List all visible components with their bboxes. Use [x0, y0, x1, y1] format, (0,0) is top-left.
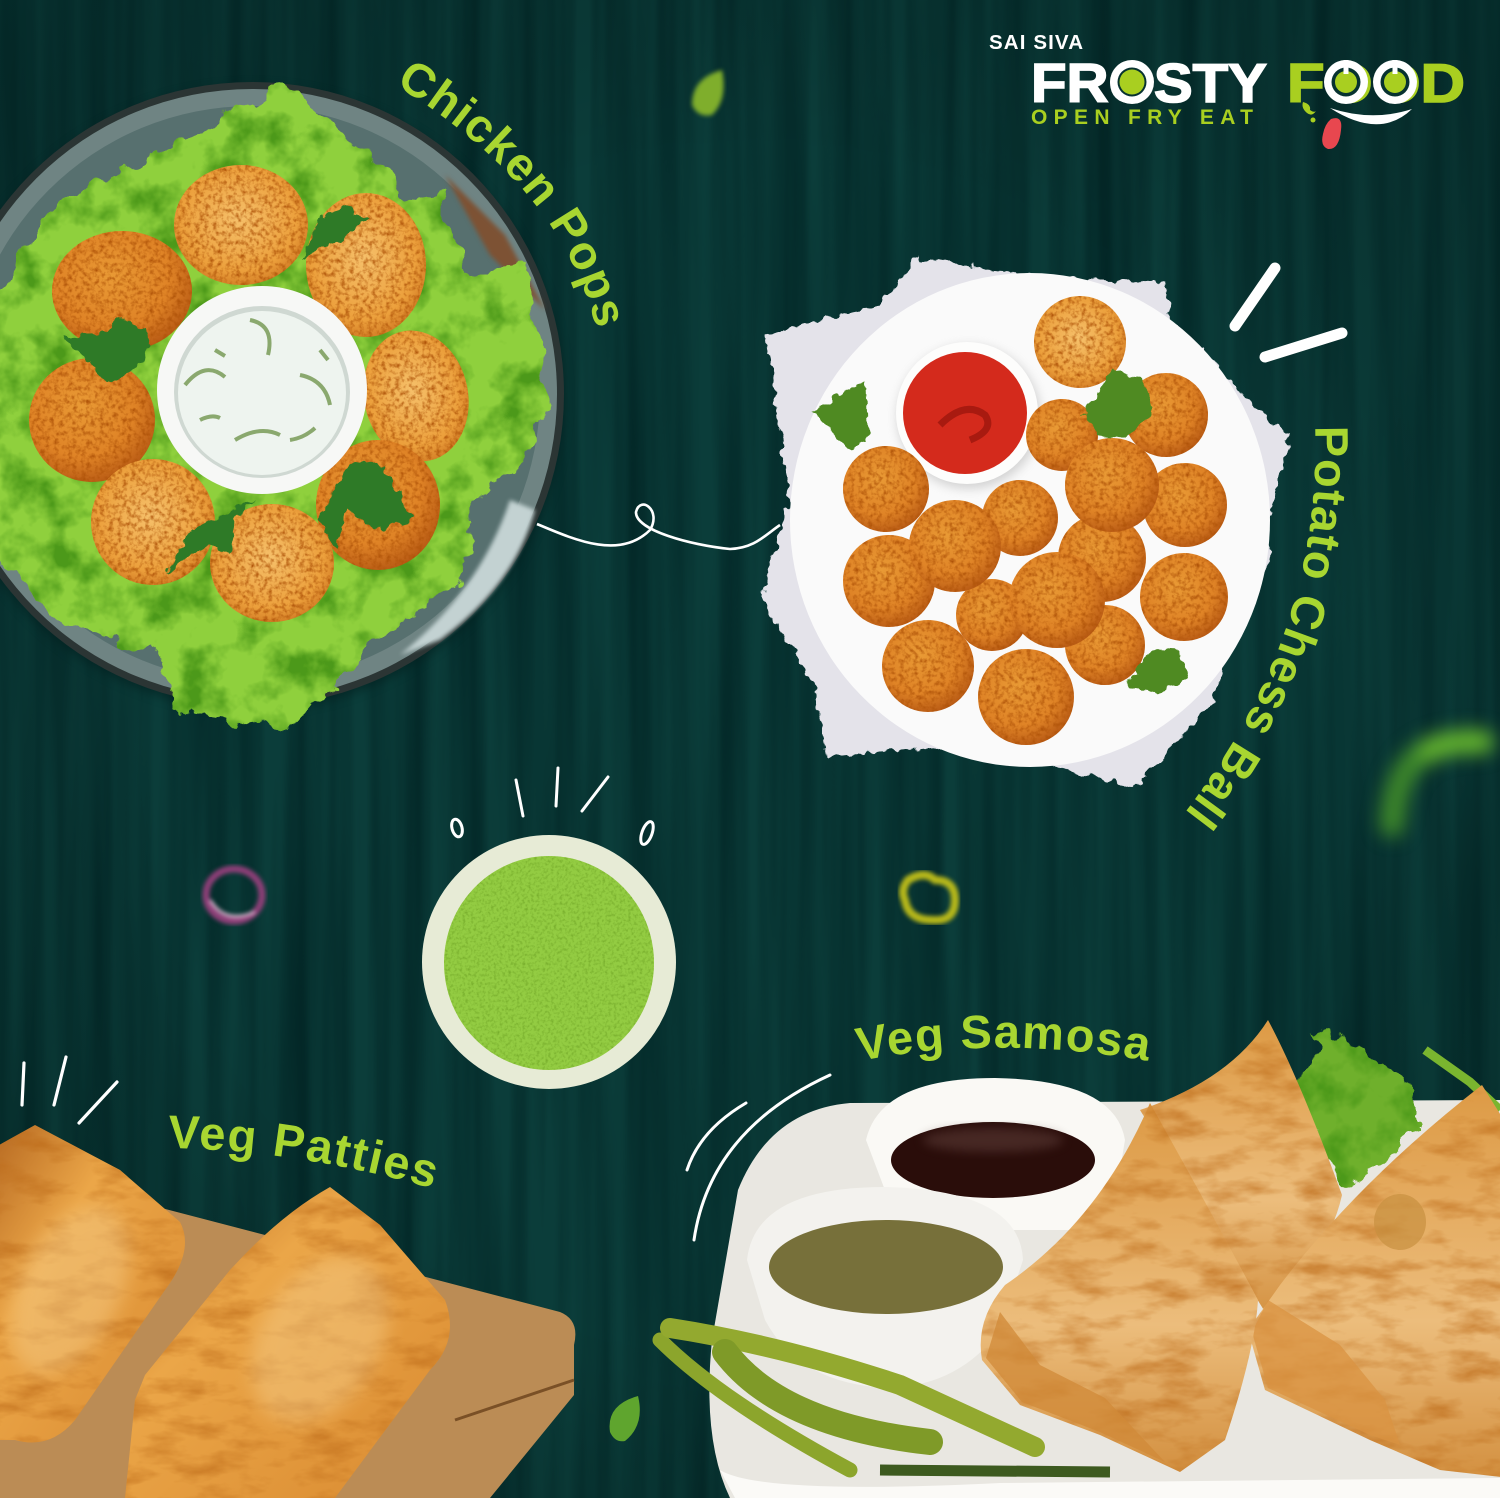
- motion arcs: [687, 1075, 830, 1240]
- decor: blurred leaf top: [692, 70, 724, 116]
- raita bowl: [157, 286, 367, 494]
- lettuce sprig: [1422, 1046, 1500, 1112]
- food wordmark: FOOD: [1287, 52, 1465, 114]
- chilli stems: [880, 1470, 1110, 1472]
- accent ticks: [1235, 268, 1342, 357]
- lettuce: [0, 88, 550, 728]
- right samosa: [1248, 1085, 1500, 1478]
- panel: green chutney bowl: [422, 768, 676, 1089]
- motion ticks: [22, 1057, 117, 1123]
- decor: onion ring: [206, 869, 262, 921]
- veg samosa label: Veg Samosa: [854, 1015, 1149, 1061]
- chicken pops label: Chicken Pops: [402, 64, 618, 326]
- connector line: [537, 505, 780, 549]
- right patty: [125, 1187, 450, 1498]
- ketchup bowl: [896, 342, 1041, 489]
- splash marks: [450, 768, 656, 846]
- chutney: [444, 856, 654, 1070]
- tagline: OPEN FRY EAT: [1031, 106, 1253, 129]
- decor: yellow pepper ring: [903, 875, 955, 920]
- panel: samosa plate: [660, 1020, 1500, 1498]
- plate rim bottom: [720, 1470, 1500, 1498]
- green chillies: [660, 1328, 1035, 1470]
- frosty wordmark: FROSTY: [1031, 52, 1267, 114]
- decor: small leaf bottom: [610, 1396, 640, 1441]
- potato chess ball label: Potato Chess Ball: [1186, 428, 1348, 832]
- front samosa: [981, 1103, 1258, 1472]
- parsley garnish: [812, 370, 1188, 692]
- smile: [1330, 108, 1412, 124]
- back samosa: [1140, 1020, 1342, 1320]
- white tray: [709, 1100, 1500, 1498]
- parsley leaves: [65, 207, 412, 572]
- wooden board: [0, 1205, 575, 1498]
- veg patties label: Veg Patties: [169, 1116, 436, 1186]
- panel: veg patties: [0, 1057, 575, 1498]
- plate: [0, 82, 564, 710]
- bowl: [422, 835, 676, 1089]
- tamarind bowl: [866, 1078, 1125, 1230]
- lettuce garnish: [1300, 1030, 1420, 1185]
- green sauce bowl: [747, 1187, 1023, 1388]
- potato balls: [843, 296, 1228, 745]
- white plate: [790, 273, 1270, 767]
- logo: Sai Siva Frosty Food: [989, 31, 1465, 149]
- brand line: SAI SIVA: [989, 31, 1083, 54]
- parchment paper: [762, 258, 1290, 787]
- droplets: [1302, 102, 1316, 122]
- fried chicken pops: [29, 165, 481, 622]
- panel: potato cheese balls plate: [762, 258, 1290, 787]
- tongue: [1322, 118, 1341, 149]
- panel: chicken pops plate: [0, 82, 564, 728]
- left patty: [0, 1125, 185, 1442]
- decor: blurred chilli right: [1392, 742, 1482, 825]
